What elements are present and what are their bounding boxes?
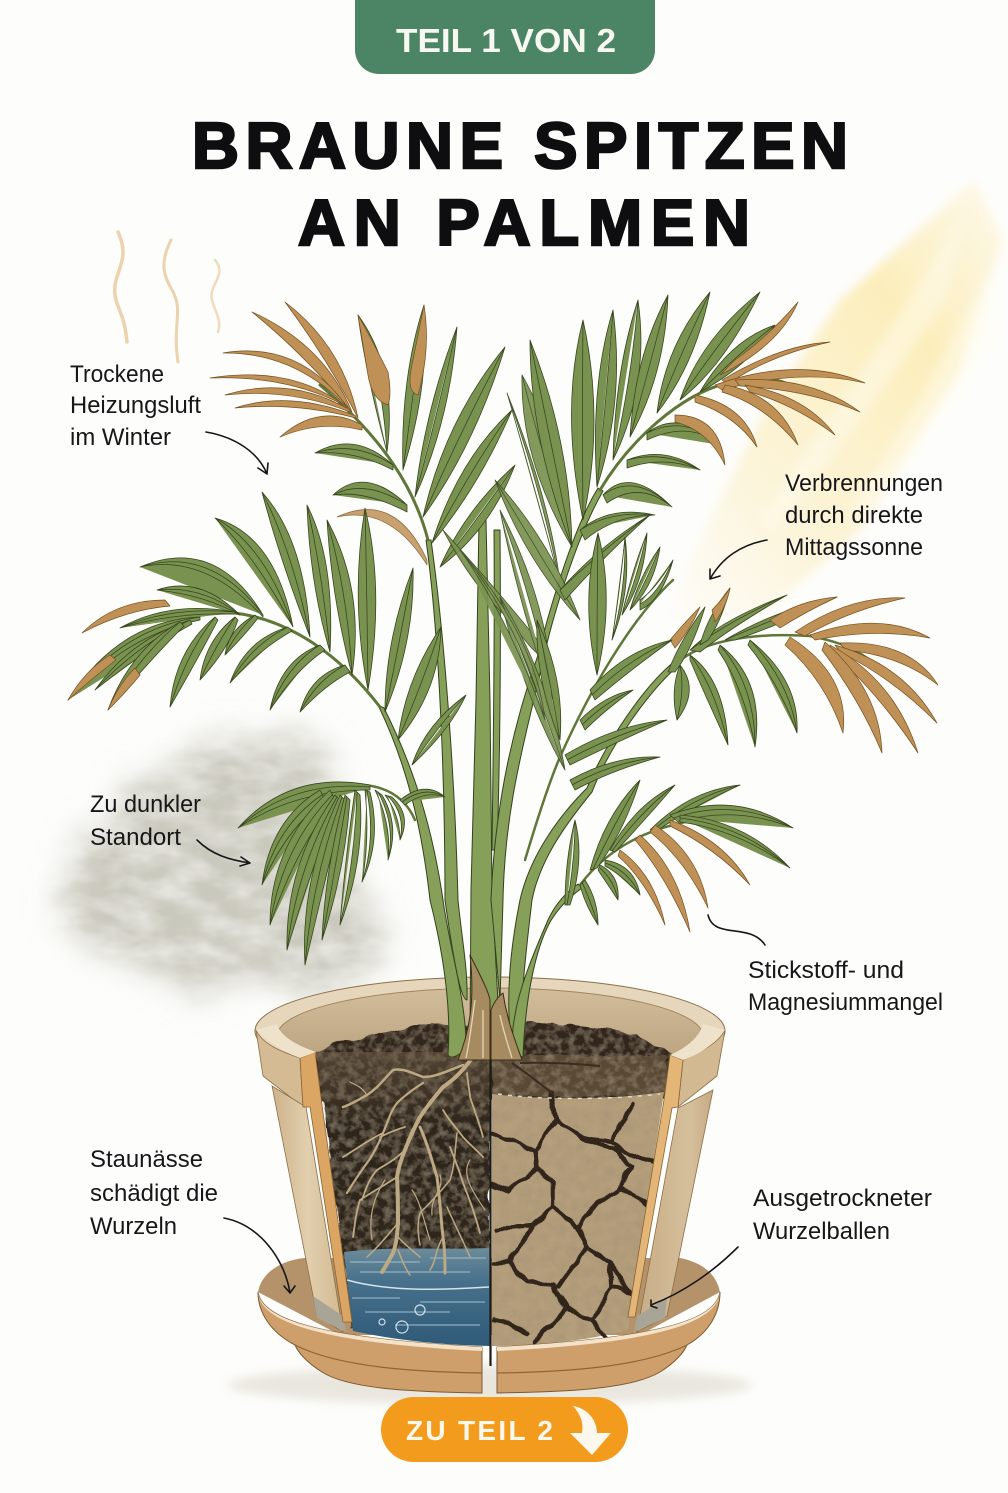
label: dry heating air: Trockene [70,361,164,388]
decoration: dark shadow smudge [60,728,385,988]
label: nitrogen and magnesium deficiency: Magnesiummangel [748,989,943,1016]
left half: wet soil section [316,1052,490,1346]
arrow: too dark location [197,840,250,866]
arrow: direct midday sun [710,540,767,579]
badge: part 1 of 2 [355,0,655,74]
label: too dark location: Standort [90,824,181,851]
label: nitrogen and magnesium deficiency [748,957,943,1016]
pot right cut wall [628,1024,725,1332]
frond: lower right, green leaflets [565,780,793,925]
frond: centre, long crossing leaflets [443,375,580,770]
centre divider line [489,955,492,1366]
label: dry heating air: Heizungsluft [70,392,201,419]
standing water [344,1248,490,1346]
frond: inner right, green leaflets [537,533,673,790]
label: nitrogen and magnesium deficiency: Stickstoff- und [748,957,904,984]
frond: upper right, green leaflets [530,292,775,600]
arrow: dried-out root ball [651,1247,738,1308]
label: direct midday sun: Mittagssonne [785,534,923,561]
label: direct midday sun: Verbrennungen [785,470,943,497]
stems [378,488,679,1060]
title: AN PALMEN [298,186,750,259]
frond: right, green leaflets [668,588,837,747]
button: to part 2: ZU TEIL 2 [406,1415,553,1446]
arrow: waterlogging [224,1218,295,1293]
frond: right, brown tips [670,588,938,753]
arrow: dry heating air [206,432,268,474]
label: direct midday sun [785,470,943,561]
saucer front halves [258,1292,720,1393]
label: too dark location [90,791,201,851]
frond: upper left, green leaflets [315,305,515,567]
label: waterlogging damages roots [90,1146,218,1240]
frond: lower right, brown tips [618,820,750,932]
label: waterlogging damages roots: schädigt die [90,1180,218,1207]
label: too dark location: Zu dunkler [90,791,201,818]
frond: lower left, green leaflets [238,782,445,965]
frond: centre left, green leaflets [68,492,466,765]
button: to part 2 [381,1397,628,1462]
saucer back [258,1258,720,1335]
label: dry heating air: im Winter [70,424,171,451]
icon: rising dry heat waves [115,232,219,362]
roots in wet soil [343,1058,485,1275]
badge: part 1 of 2: TEIL 1 VON 2 [396,22,616,59]
title [192,109,848,259]
right half: dry soil top [492,1056,667,1096]
illustration: potted palm [68,292,938,1393]
soil surface behind the cut [316,1022,672,1100]
label: waterlogging damages roots: Wurzeln [90,1213,177,1240]
label: dried-out root ball [753,1185,932,1245]
decoration: table shadow [228,1365,752,1405]
right half: dry cracked clay [492,1063,664,1346]
connector: nutrient deficiency [708,915,765,945]
frond: centre left, brown tips [68,600,170,710]
decoration: sun rays [665,180,1003,622]
label: dry heating air [70,361,201,451]
label: dried-out root ball: Ausgetrockneter [753,1185,932,1212]
title: BRAUNE SPITZEN [192,109,848,182]
label: direct midday sun: durch direkte [785,502,923,529]
label: dried-out root ball: Wurzelballen [753,1218,890,1245]
frond: upper left, brown tips [210,302,427,565]
frond: upper right, brown tips [675,302,865,465]
pot back rim and interior [255,977,725,1085]
rachis lines [105,378,870,885]
label: waterlogging damages roots: Staunässe [90,1146,203,1173]
icon: curved down arrow [570,1406,611,1455]
pot left cut wall [256,1024,352,1332]
